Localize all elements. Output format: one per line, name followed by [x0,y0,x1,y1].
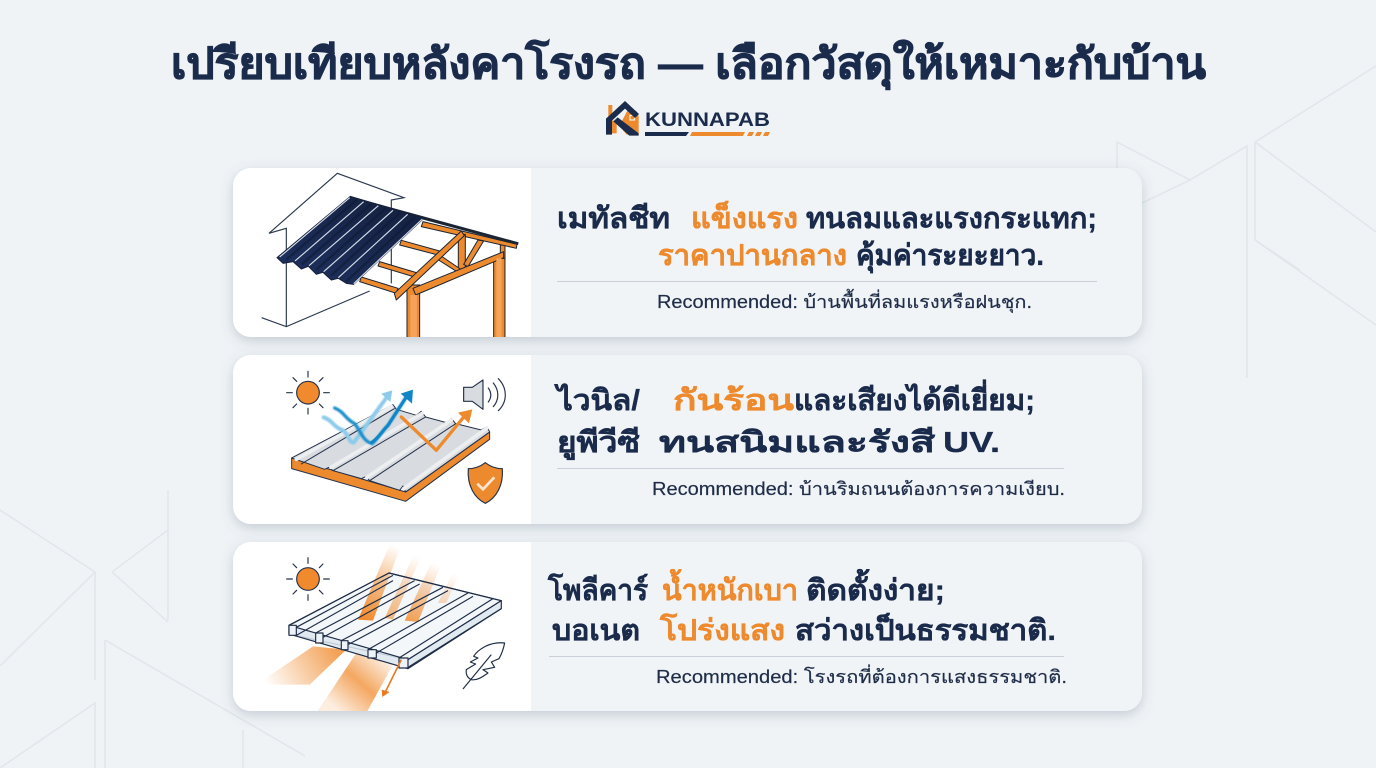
text block: benefits: ติดตั้งง่าย; [806,568,945,607]
logo: KUNNAPAB: KUNNAPAB [645,110,770,131]
text block: benefits: ทนสนิมและรังสี [659,427,935,459]
illustration: polycarbonate sheet with light [256,545,505,713]
text block: benefits [659,379,1035,459]
text: recommendation: Recommended: บ้านริมถนนต้องการความเงียบ. [652,479,1065,499]
text block: benefits: น้ำหนักเบา [662,568,798,607]
panel: metal sheet [233,168,1142,338]
title: เปรียบเทียบหลังคาโรงรถ — เลือกวัสดุให้เหมาะกับบ้าน [171,39,1206,90]
text block: benefits: UV. [943,427,1000,459]
illustration: vinyl sheet with heat and sound [287,371,505,503]
heading: material name: ไวนิล/ [554,383,640,417]
icon: sun [287,558,329,600]
logo: KUNNAPAB [606,101,770,136]
text block: benefits: กันร้อน [673,385,794,417]
text block: benefits: คุ้มค่าระยะยาว. [856,240,1044,273]
icon: shield check [468,463,502,503]
heading: material name: เมทัลชีท [557,203,670,235]
heading: material name: โพลีคาร์ [547,572,648,607]
icon: speaker [464,379,505,411]
text block: benefits: แข็งแรง [691,200,798,235]
arrow: light through sheet [386,660,401,691]
text block: benefits: ทนลมและแรงกระแทก; [806,203,1097,235]
icon: feather [463,643,505,689]
icon: sheet [289,545,501,669]
text: recommendation: Recommended: บ้านพื้นที่ลมแรงหรือฝนชุก. [657,289,1032,313]
heading: material name: บอเนต [552,615,640,647]
heading: material name [547,572,648,647]
text block: benefits: สว่างเป็นธรรมชาติ. [795,612,1056,647]
text block: benefits [658,200,1097,273]
icon: sun [287,371,329,414]
panel: polycarbonate [233,542,1142,713]
illustration: metal sheet carport roof [262,173,519,338]
heading: material name: ยูพีวีซี [557,427,640,460]
heading: material name [554,383,640,460]
text block: benefits [659,568,1056,647]
text block: benefits: โปร่งแสง [659,612,785,647]
panel: vinyl / uPVC [233,355,1142,524]
text: recommendation: Recommended: โรงรถที่ต้องการแสงธรรมชาติ. [656,664,1067,687]
text block: benefits: ราคาปานกลาง [658,240,847,272]
text block: benefits: และเสียงได้ดีเยี่ยม; [794,379,1035,417]
arrows: heat and sound waves [324,397,465,450]
